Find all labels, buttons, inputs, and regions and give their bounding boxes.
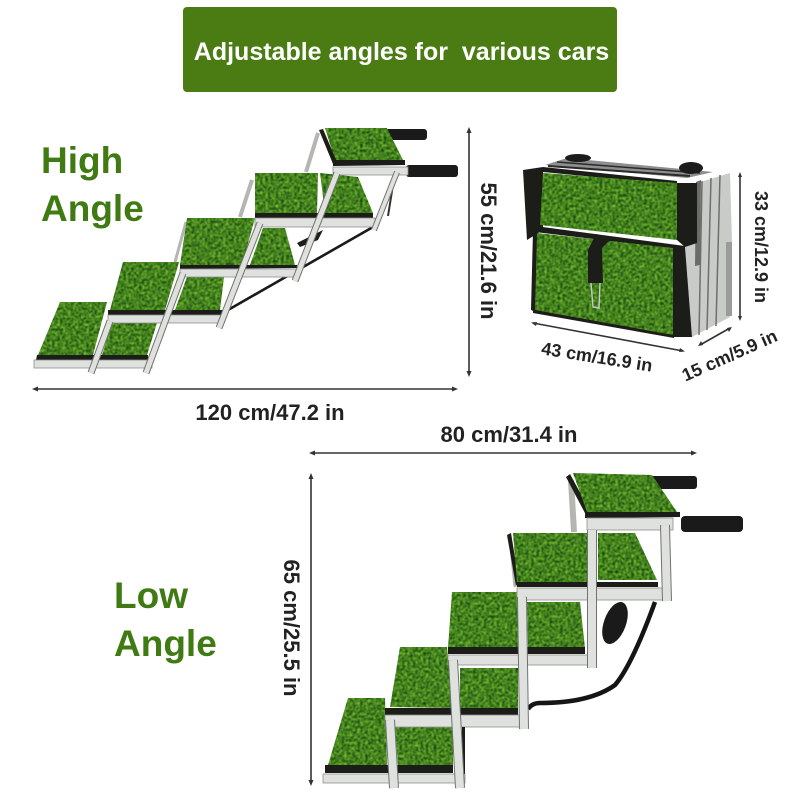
strap (228, 185, 393, 310)
illustration: high angle ramp (34, 128, 458, 373)
heading: Low Angle (114, 575, 217, 664)
dimension: 80 cm length: 80 cm/31.4 in (441, 422, 577, 447)
dimension: 80 cm length (309, 422, 697, 456)
turf (328, 473, 677, 765)
back legs (175, 133, 318, 262)
handles (650, 476, 743, 532)
turf (38, 128, 403, 355)
title banner (183, 7, 617, 92)
dimension: 65 cm height: 65 cm/25.5 in (279, 560, 304, 696)
step frames (323, 512, 680, 783)
front legs (91, 172, 397, 373)
illustration: low angle ramp (323, 473, 743, 788)
heading: Low Angle: Low (114, 575, 188, 616)
dimension: 55 cm height: 55 cm/21.6 in (476, 183, 501, 319)
heading: Low Angle: Angle (114, 623, 217, 664)
dimension: 43 cm width (531, 322, 685, 376)
dimension: 120 cm length (32, 386, 458, 425)
front legs (390, 525, 667, 788)
step frames (34, 129, 408, 368)
dimension: 65 cm height (279, 473, 314, 786)
black frames and knobs (523, 154, 703, 338)
dimension: 43 cm width: 43 cm/16.9 in (540, 338, 654, 376)
strap and pouch (528, 599, 655, 709)
heading: High Angle (41, 140, 144, 229)
turf panels (535, 173, 677, 335)
heading: High Angle: Angle (41, 188, 144, 229)
dimension: 33 cm height (738, 172, 771, 321)
dimension: 33 cm height: 33 cm/12.9 in (751, 191, 771, 303)
handles (385, 129, 458, 177)
title banner: Adjustable angles for various cars (194, 38, 609, 66)
buckle and clip (588, 234, 612, 308)
back legs (507, 474, 590, 587)
dimension: 55 cm height (466, 127, 501, 377)
illustration: folded ramp (523, 154, 732, 338)
top rails (545, 158, 713, 178)
dimension: 120 cm length: 120 cm/47.2 in (195, 400, 345, 425)
folded side panels (685, 173, 732, 337)
dimension: 15 cm depth: 15 cm/5.9 in (679, 326, 780, 385)
heading: High Angle: High (41, 140, 123, 181)
